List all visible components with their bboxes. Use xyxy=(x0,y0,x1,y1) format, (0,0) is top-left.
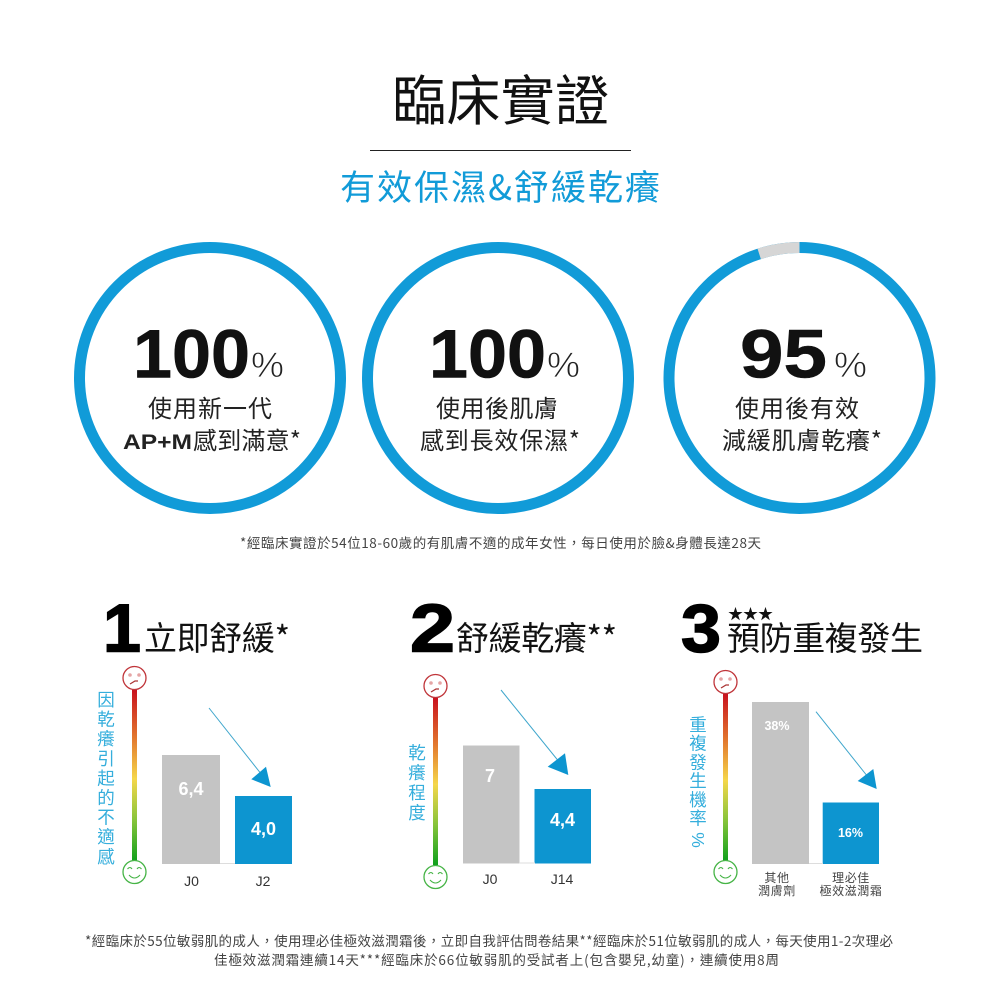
section 3 heading: ★★★ xyxy=(728,606,773,623)
bottom footnote: *經臨床於55位敏弱肌的成人，使用理必佳極效滋潤霜後，立即自我評估問卷結果**經臨床於51位敏弱肌的成人，每天使用1-2次理必 xyxy=(85,930,894,950)
bar: J0 7: 7 xyxy=(485,766,495,786)
stat ring: 100% satisfied: 感到滿意* xyxy=(193,421,301,456)
bar: Lipikar 16% xyxy=(819,802,883,899)
bar: J0 6,4 xyxy=(162,755,220,889)
bar: J2 4,0: J2 xyxy=(256,873,271,889)
section 2 heading: 舒緩乾癢** xyxy=(456,612,617,660)
stat ring: 95% relief: 減緩肌膚乾癢* xyxy=(722,421,882,456)
stat ring: 95% relief xyxy=(669,248,930,508)
section 2 chart xyxy=(408,674,591,888)
bottom footnote xyxy=(85,930,894,969)
stat ring: 100% satisfied: 使用新一代 xyxy=(148,389,272,424)
subtitle: 有效保濕&舒緩乾癢 xyxy=(340,160,660,211)
bar: other moisturisers 38%: 潤膚劑 xyxy=(758,882,796,899)
thermometer scale with faces xyxy=(123,666,146,884)
bar: J0 7 xyxy=(463,746,520,887)
bar: J2 4,0: 4,0 xyxy=(251,819,276,839)
bar: other moisturisers 38% xyxy=(752,702,809,899)
section 1 heading xyxy=(103,590,290,666)
dryness axis label: 乾癢程度 xyxy=(408,740,426,825)
thermometer scale with faces xyxy=(714,670,737,884)
stat ring: 95% relief: 95 xyxy=(740,316,827,392)
bar: Lipikar 16%: 16% xyxy=(838,826,863,840)
section 3 heading: 預防重複發生 xyxy=(727,612,923,660)
bar: other moisturisers 38%: 其他 xyxy=(764,869,790,886)
title: 臨床實證 xyxy=(392,57,609,136)
section 1 chart xyxy=(97,666,292,889)
bar: J14 4,4: 4,4 xyxy=(550,810,575,830)
bar: J14 4,4 xyxy=(534,789,591,887)
section 3 heading xyxy=(681,590,923,666)
bar: J0 7: J0 xyxy=(483,871,498,887)
bar: J0 6,4: J0 xyxy=(184,873,199,889)
stat ring: 100% satisfied: AP+M xyxy=(123,431,192,454)
stat ring: 100% long-lasting moisture: 使用後肌膚 xyxy=(436,389,558,424)
stat ring: 100% satisfied: % xyxy=(251,346,284,385)
bar: Lipikar 16%: 理必佳 xyxy=(832,869,870,886)
bar: other moisturisers 38%: 38% xyxy=(764,719,790,733)
stat ring: 100% long-lasting moisture: % xyxy=(547,346,580,385)
bottom footnote: 佳極效滋潤霜連續14天***經臨床於66位敏弱肌的受試者上(包含嬰兒,幼童)，連續使用8周 xyxy=(214,949,779,969)
stat ring: 100% satisfied: 100 xyxy=(133,316,250,392)
section 1 heading: 立即舒緩* xyxy=(144,612,290,660)
recurrence axis label: % xyxy=(688,832,708,848)
stat ring: 95% relief: 使用後有效 xyxy=(735,389,859,424)
thermometer scale with faces xyxy=(424,674,447,888)
bar: J14 4,4: J14 xyxy=(551,871,573,887)
bar: J2 4,0 xyxy=(235,796,292,889)
recurrence axis label: 重複發生機率 xyxy=(689,712,707,830)
bar: J0 6,4: 6,4 xyxy=(178,779,204,799)
stat ring: 100% long-lasting moisture: 感到長效保濕* xyxy=(420,421,580,456)
stat ring: 100% long-lasting moisture xyxy=(368,248,628,508)
bar: Lipikar 16%: 極效滋潤霜 xyxy=(819,882,883,899)
arrow: decrease xyxy=(209,708,271,787)
section 3 heading: 3 xyxy=(681,590,721,666)
section 2 heading xyxy=(410,590,617,666)
section 3 chart xyxy=(688,670,883,899)
section 2 heading: 2 xyxy=(410,590,455,666)
stat ring: 100% long-lasting moisture: 100 xyxy=(429,316,546,392)
section 1 heading: 1 xyxy=(103,590,141,666)
arrow: decrease xyxy=(816,712,877,789)
study footnote: *經臨床實證於54位18-60歲的有肌膚不適的成年女性，每日使用於臉&身體長達28天 xyxy=(240,532,762,552)
discomfort axis label: 因乾癢引起的不適感 xyxy=(97,687,115,869)
arrow: decrease xyxy=(501,690,568,775)
stat ring: 100% satisfied xyxy=(80,248,340,508)
stat ring: 95% relief: % xyxy=(834,346,867,385)
